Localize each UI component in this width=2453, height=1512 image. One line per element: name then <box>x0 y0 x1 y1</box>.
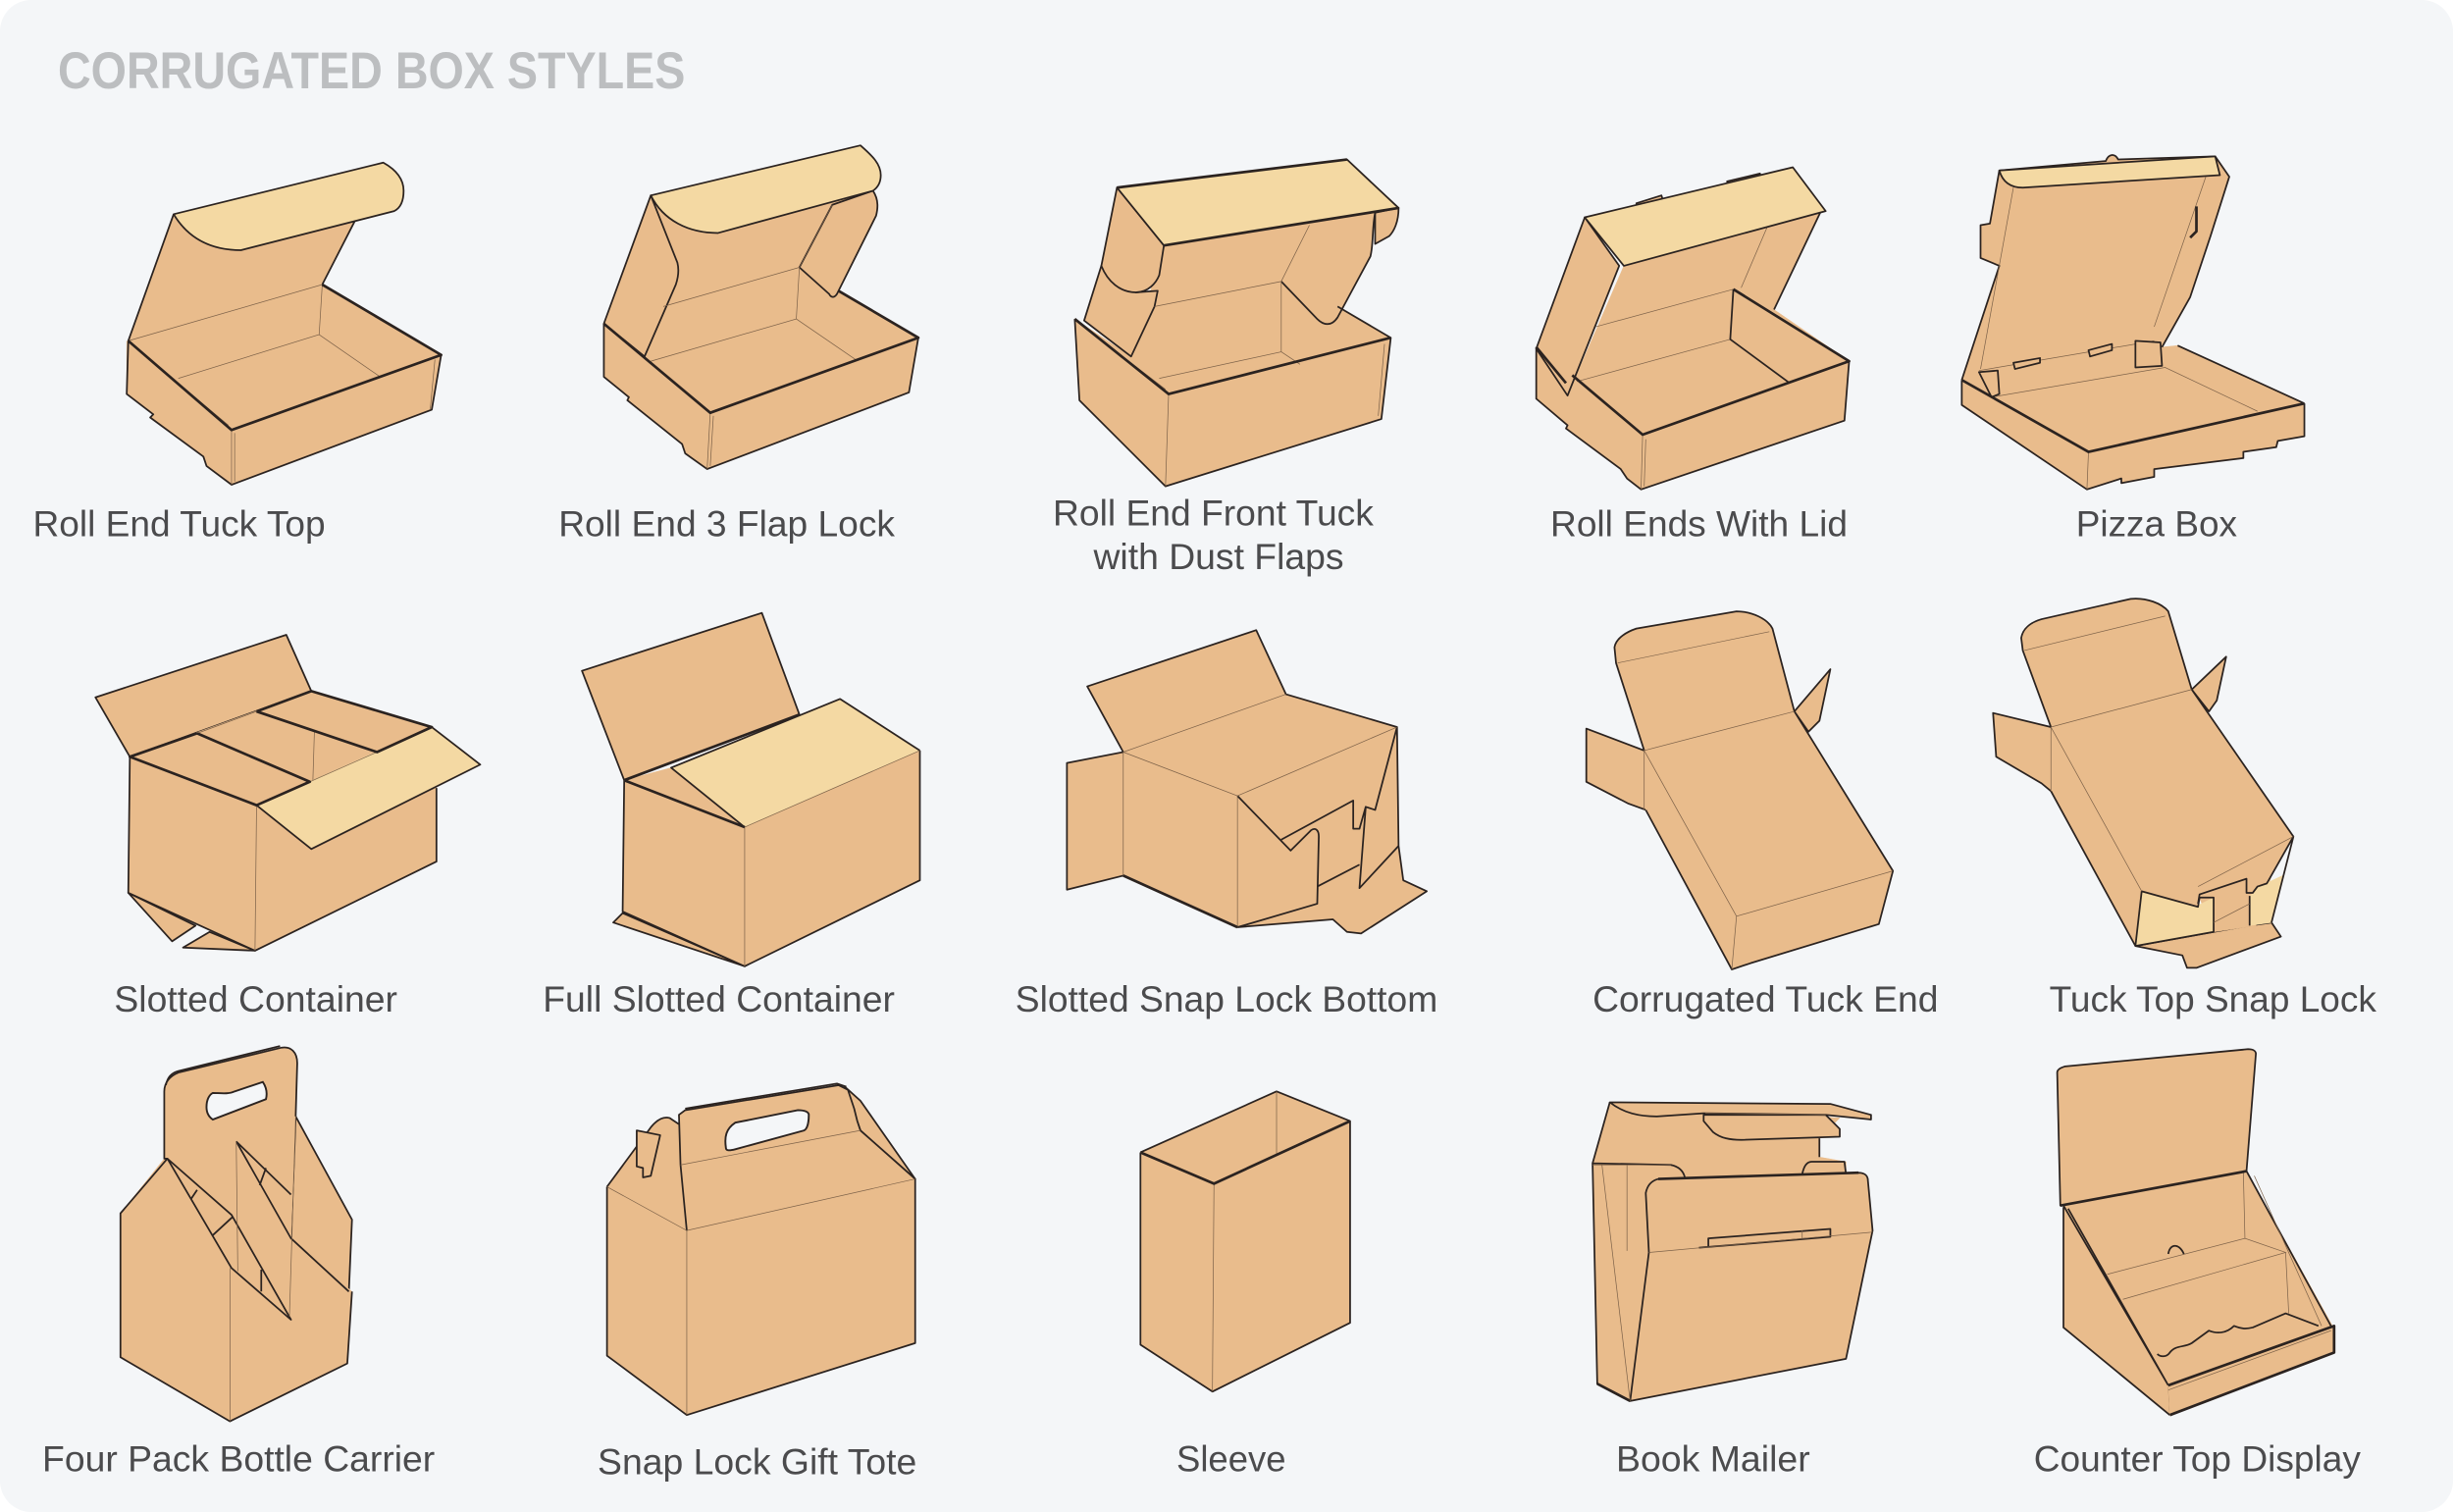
icon: slotted container box <box>95 635 480 951</box>
label: Tuck Top Snap Lock <box>2050 979 2377 1019</box>
label: Slotted Container <box>114 979 397 1019</box>
icon: book mailer <box>1592 1102 1872 1401</box>
label: Snap Lock Gift Tote <box>598 1442 916 1483</box>
panel: Book Mailer <box>1592 1102 1872 1480</box>
label: Roll End Tuck Top <box>32 504 326 545</box>
label: Four Pack Bottle Carrier <box>42 1439 435 1480</box>
icon: sleeve <box>1140 1091 1350 1391</box>
icon: counter top display <box>2058 1049 2334 1415</box>
icon: corrugated tuck end box <box>1587 611 1893 969</box>
panel: Roll End Front Tuck with Dust Flaps <box>1053 160 1398 577</box>
label: Corrugated Tuck End <box>1592 979 1938 1019</box>
panel: Tuck Top Snap Lock <box>1993 599 2377 1019</box>
label: Slotted Snap Lock Bottom <box>1016 979 1437 1019</box>
icon: full slotted container box <box>582 613 920 966</box>
icon: snap lock gift tote <box>607 1083 915 1415</box>
icon: slotted snap lock bottom box <box>1067 630 1427 933</box>
label: Roll Ends With Lid <box>1550 504 1848 545</box>
label: Roll End 3 Flap Lock <box>558 504 896 545</box>
icon: roll end front tuck box <box>1074 160 1398 487</box>
panel: Slotted Container <box>95 635 480 1019</box>
title: CORRUGATED BOX STYLES <box>58 42 685 100</box>
label: Pizza Box <box>2076 504 2237 545</box>
label: Counter Top Display <box>2034 1439 2362 1480</box>
panel: Roll End 3 Flap Lock <box>558 145 918 545</box>
panel: Full Slotted Container <box>543 613 920 1019</box>
panel: Pizza Box <box>1961 155 2305 545</box>
icon: tuck top snap lock box <box>1993 599 2293 967</box>
panel: Sleeve <box>1140 1091 1350 1480</box>
label: Book Mailer <box>1616 1439 1810 1480</box>
icon: pizza box <box>1961 155 2305 490</box>
icon: four pack bottle carrier <box>121 1046 352 1422</box>
label: Sleeve <box>1176 1439 1286 1480</box>
panel: Four Pack Bottle Carrier <box>42 1046 435 1480</box>
label: Full Slotted Container <box>543 979 895 1019</box>
icon: roll ends with lid box <box>1537 168 1850 490</box>
label line 2: with Dust Flaps <box>1092 537 1344 577</box>
panel: Roll End Tuck Top <box>32 163 442 545</box>
panel: Snap Lock Gift Tote <box>598 1083 916 1483</box>
icon: roll end tuck top box <box>127 163 442 485</box>
icon: roll end 3 flap lock box <box>603 145 918 469</box>
panel: Counter Top Display <box>2034 1049 2362 1480</box>
panel: Corrugated Tuck End <box>1587 611 1938 1019</box>
panel: Slotted Snap Lock Bottom <box>1016 630 1437 1019</box>
label: Roll End Front Tuck <box>1053 493 1375 533</box>
panel: Roll Ends With Lid <box>1537 168 1850 545</box>
